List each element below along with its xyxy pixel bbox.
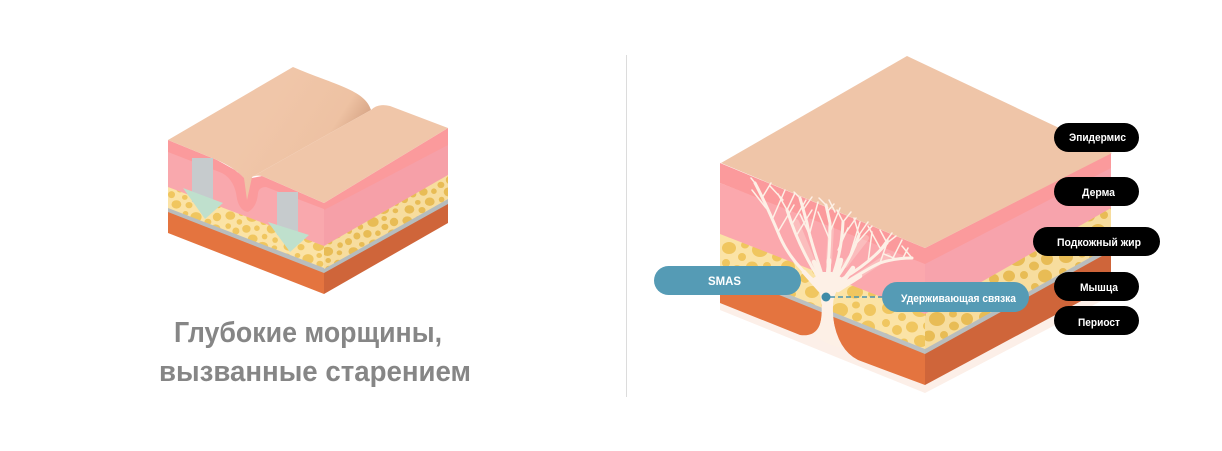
skin block: deep wrinkle: [168, 67, 448, 294]
connector: dot: [822, 292, 830, 302]
label: periosteum: [1054, 306, 1139, 335]
label: retaining ligament: [882, 282, 1029, 312]
ligament tree: [751, 178, 912, 348]
left face layers: [168, 140, 324, 294]
label: SMAS: [654, 266, 801, 295]
label: periosteum: Периост: [1078, 317, 1121, 329]
caption: Глубокие морщины,: [174, 317, 442, 349]
caption: вызванные старением: [159, 356, 471, 388]
pale base shadow: [720, 270, 1111, 393]
label: epidermis: [1054, 123, 1139, 152]
label: subcutaneous fat: Подкожный жир: [1057, 237, 1141, 249]
left face layers: [720, 163, 925, 385]
front skin surface: [252, 105, 448, 203]
label: epidermis: Эпидермис: [1069, 132, 1126, 144]
back skin surface: [168, 67, 371, 200]
label: subcutaneous fat: [1033, 227, 1160, 256]
connector: dashed line: [830, 296, 882, 298]
label: dermis: [1054, 177, 1139, 206]
caption: [159, 317, 471, 388]
divider: [626, 55, 627, 397]
arrow: left: [183, 158, 223, 219]
right face layers: [324, 128, 448, 294]
label: retaining ligament: Удерживающая связка: [901, 293, 1017, 305]
skin block: anatomy: [720, 56, 1112, 393]
right face layers: [925, 153, 1111, 385]
label: dermis: Дерма: [1082, 187, 1116, 199]
label: SMAS: SMAS: [708, 274, 741, 288]
label: muscle: Мышца: [1080, 282, 1119, 294]
label: muscle: [1054, 272, 1139, 301]
arrow: right: [268, 192, 309, 252]
top skin surface: [721, 56, 1112, 248]
